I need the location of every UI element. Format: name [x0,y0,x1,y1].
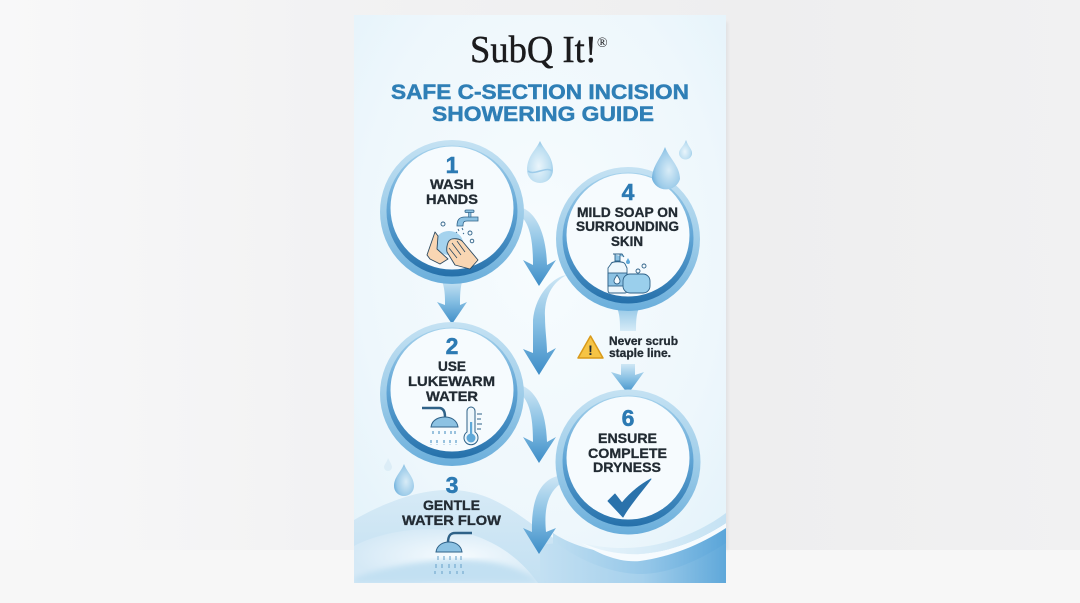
step 1 label: WASH [430,176,474,192]
title: SAFE C-SECTION INCISION [391,81,689,104]
step 1 label: HANDS [426,191,478,207]
warning callout [578,336,678,360]
warning text: staple line. [609,348,671,360]
icon: shower head [435,533,472,574]
arrow: step 1 curved [521,208,556,286]
step 6 circle [556,390,700,534]
water drop: left of step 3 [394,464,414,496]
step 2 label: WATER [426,388,478,404]
step 2 circle [380,322,524,466]
title [391,81,689,126]
step 2 label: LUKEWARM [408,373,495,389]
step 3 [402,472,502,574]
wave background [354,490,726,583]
poster shadow [724,22,728,550]
logo: SubQ It!: ® [597,36,608,51]
step 4 label: SKIN [611,233,643,249]
step 4 label: SURROUNDING [576,218,679,234]
warning exclamation: ! [588,342,593,358]
icon: checkmark [608,479,651,517]
arrow: step 4 curved [523,275,567,375]
step 6 label: ENSURE [598,430,657,446]
poster [354,15,726,583]
arrow: step 1 to 2 [437,278,467,324]
water drop: small top right [679,140,692,160]
floor [0,550,1080,603]
arrow: step 6 curved [523,476,560,554]
step 1 circle [380,140,524,284]
icon: shower head [422,408,458,445]
step 6 label: DRYNESS [593,459,661,475]
step 6 label: COMPLETE [588,445,667,461]
step 2 label [408,358,495,404]
step 3 number: 3 [446,472,458,498]
icon: thermometer [464,407,482,445]
step 3 label [402,497,502,528]
step 1 label [426,176,478,207]
step 4 number: 4 [622,179,635,205]
step 1 number: 1 [446,152,459,178]
step 4 circle [556,167,700,311]
arrow: step 2 curved [521,386,556,463]
step 2 label: USE [438,358,466,374]
water drop: small left of step 3 [384,458,392,471]
icon: washing hands [427,210,478,269]
step 4 label [576,204,679,249]
step 2 number: 2 [446,333,458,359]
title: SHOWERING GUIDE [432,103,654,126]
step 3 label: GENTLE [423,497,480,513]
logo: SubQ It!: SubQ It! [470,29,597,71]
warning text [609,336,678,360]
water drop: top centre [527,141,553,183]
step 4 label: MILD SOAP ON [577,204,678,220]
step 3 label: WATER FLOW [402,512,502,528]
step 6 number: 6 [622,405,634,431]
warning text: Never scrub [609,336,678,348]
arrow: warning to step 6 [611,364,644,394]
arrow: step 4 stem [616,305,640,331]
step 6 label [588,430,667,475]
icon: soap bottle and bar [608,254,650,293]
water drop: on step 4 [652,147,680,189]
icon: warning triangle [578,336,603,358]
